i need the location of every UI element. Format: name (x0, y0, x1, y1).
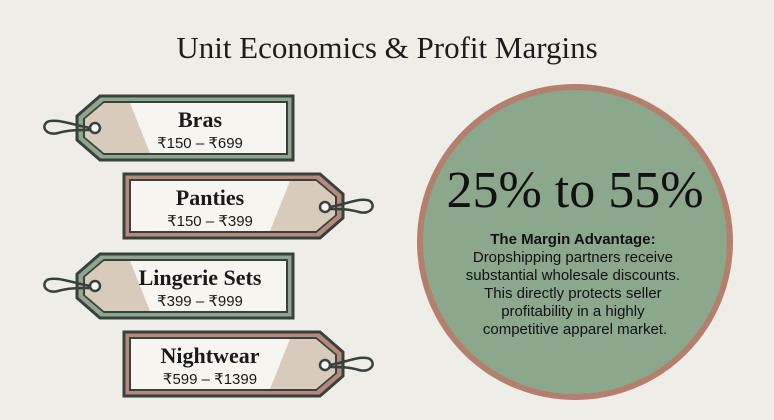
margin description: This directly protects seller (484, 285, 662, 302)
margin description: competitive apparel market. (483, 321, 667, 338)
tag: Lingerie Sets: Lingerie Sets (139, 265, 262, 290)
tag: Lingerie Sets (44, 254, 293, 318)
title: Unit Economics & Profit Margins (176, 30, 598, 65)
tag: Lingerie Sets: ₹399 – ₹999 (157, 293, 243, 310)
margin figure: 25% to 55% (446, 162, 704, 219)
margin description: substantial wholesale discounts. (466, 267, 680, 284)
tag: Nightwear: ₹599 – ₹1399 (163, 371, 257, 388)
tag: Bras (44, 96, 293, 160)
margin description: profitability in a highly (501, 303, 645, 320)
tag: Nightwear: Nightwear (161, 343, 260, 368)
margin description: The Margin Advantage: (490, 231, 656, 248)
callout circle: margin (420, 87, 730, 397)
tag: Bras: ₹150 – ₹699 (157, 135, 243, 152)
tag: Panties: Panties (176, 185, 245, 210)
margin description: Dropshipping partners receive (473, 249, 673, 266)
tag: Panties (124, 174, 373, 238)
tag: Nightwear (124, 332, 373, 396)
tag: Bras: Bras (178, 107, 222, 132)
tag: Panties: ₹150 – ₹399 (167, 213, 253, 230)
